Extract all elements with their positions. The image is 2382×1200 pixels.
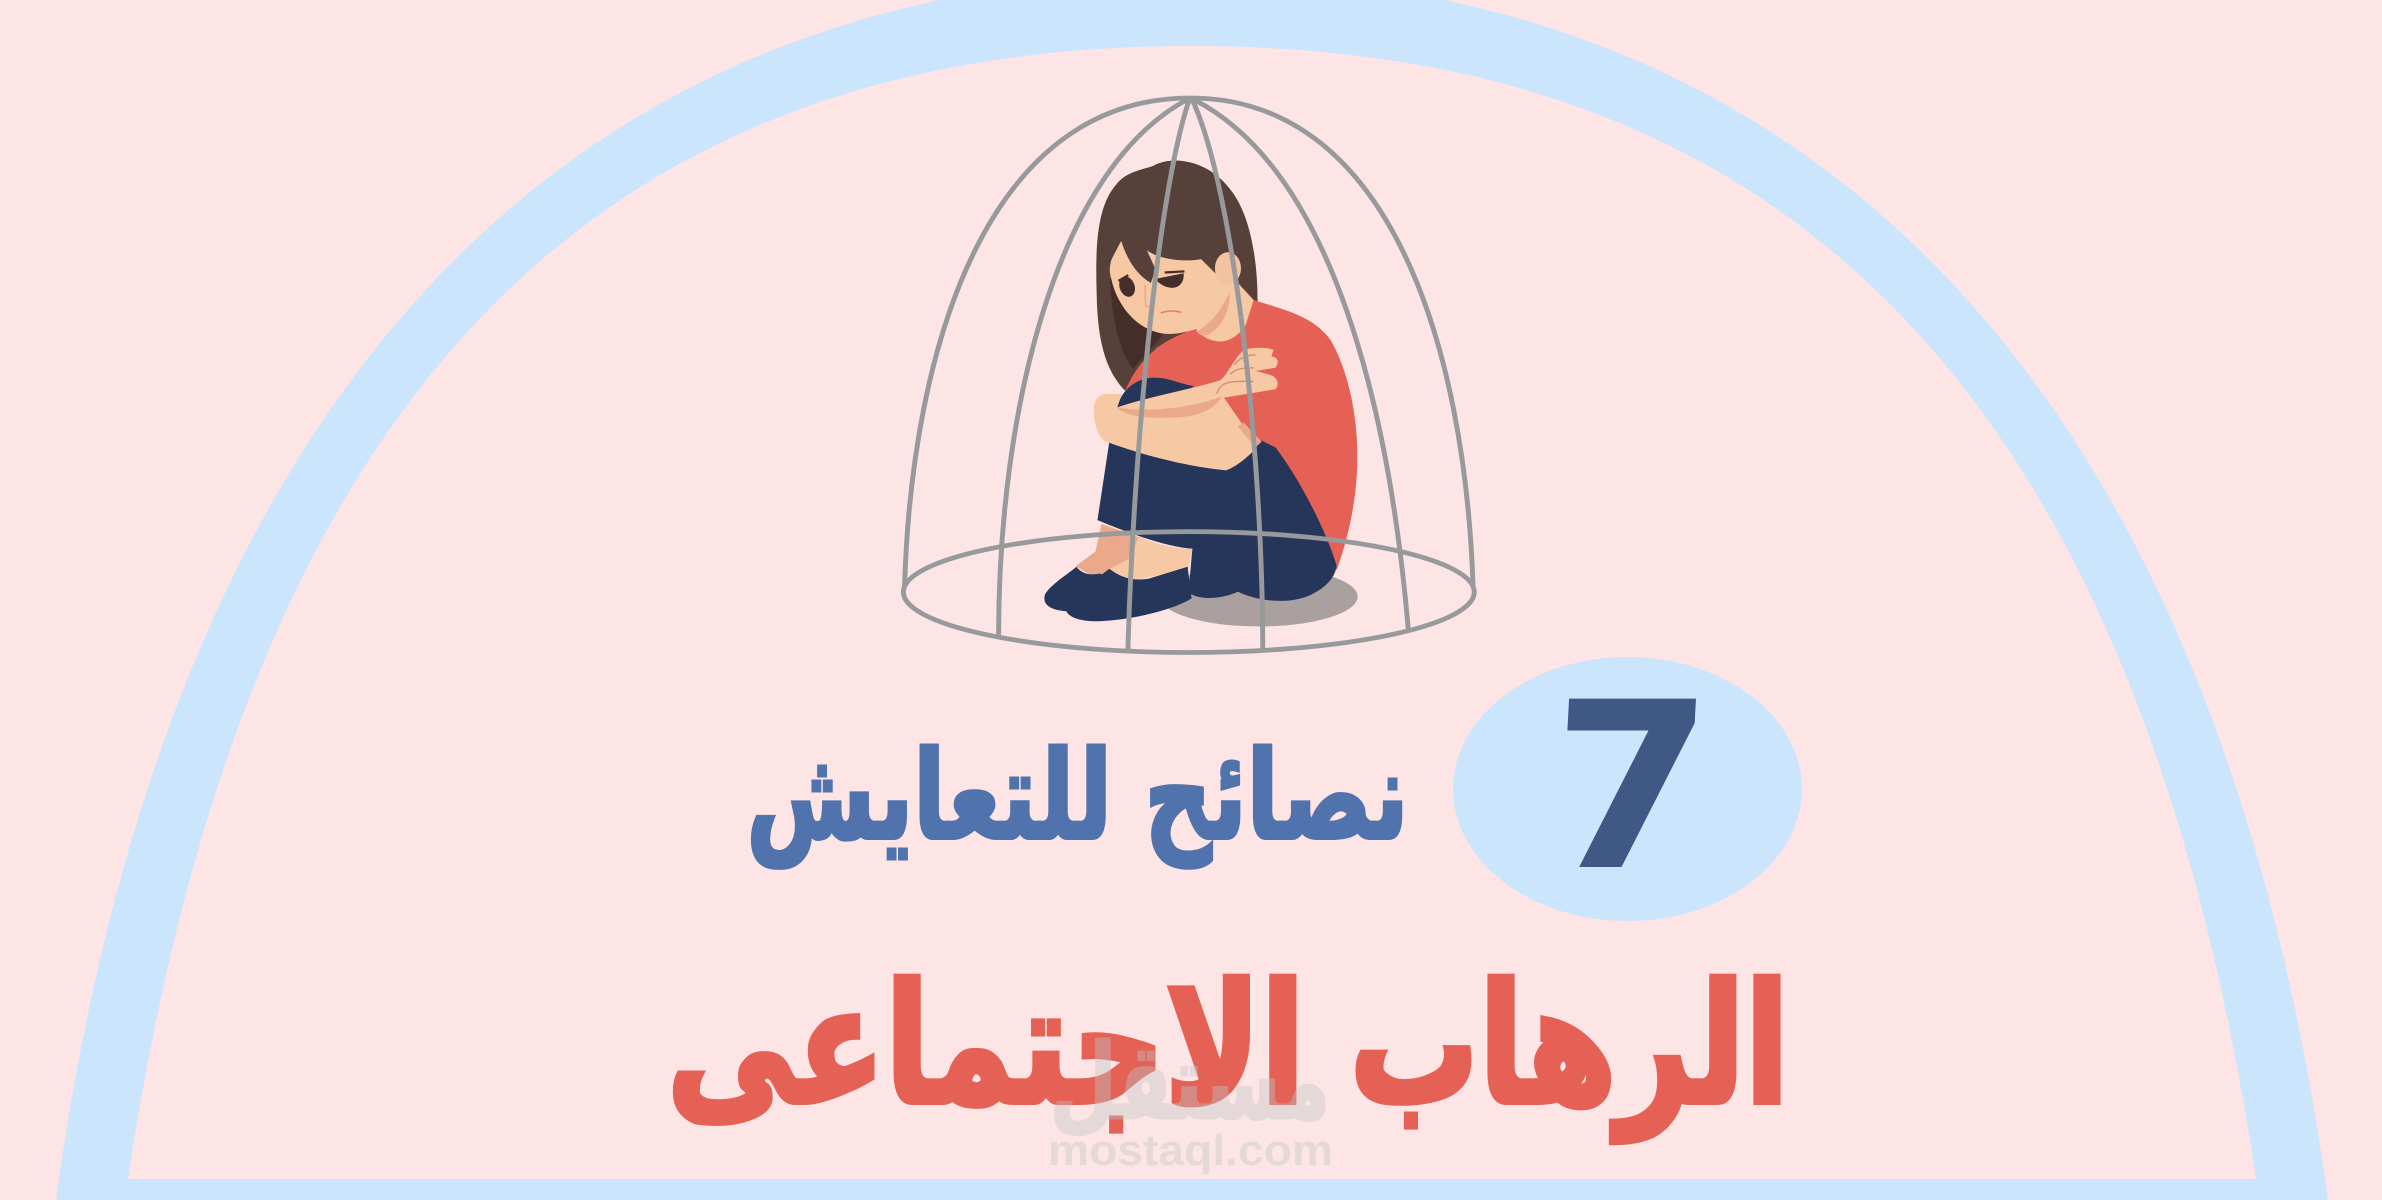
navy knee: [1117, 378, 1194, 409]
illustration: girl in a glass cage: [903, 98, 1474, 653]
main title: الرهاب الاجتماعى: [667, 949, 1789, 1142]
watermark url: mostaql.com: [1048, 1126, 1333, 1175]
mouth: [1161, 311, 1181, 313]
forearm shadow: [1117, 396, 1222, 418]
centre left rib: [1128, 100, 1189, 650]
right rib: [1194, 100, 1408, 629]
back ankle: [1076, 524, 1142, 577]
dark inner hair: [1110, 271, 1165, 369]
front shoe: [1066, 567, 1192, 621]
face: [1110, 241, 1238, 334]
left eye: [1117, 275, 1138, 299]
nose: [1145, 285, 1153, 308]
navy legs: [1097, 441, 1337, 601]
neck: [1196, 264, 1254, 342]
neck shadow: [1197, 292, 1230, 336]
number badge: [1453, 652, 1802, 922]
outer dome: [905, 98, 1473, 587]
front hair: [1111, 161, 1239, 283]
number seven: 7: [1542, 652, 1717, 922]
red shirt: [1125, 300, 1357, 570]
elbow shadow: [1238, 423, 1262, 447]
wire cage: [903, 98, 1474, 653]
front ankle: [1109, 536, 1192, 581]
left rib: [999, 100, 1186, 635]
back shoe: [1044, 567, 1117, 611]
cage base ring: [903, 532, 1474, 653]
girl hugging her knees: [1044, 161, 1358, 626]
back hair: [1096, 161, 1258, 391]
ear: [1215, 252, 1241, 284]
eyebrows: [1118, 271, 1184, 281]
arms and hand: [1094, 348, 1278, 470]
centre right rib: [1192, 100, 1263, 650]
finger lines: [1217, 355, 1256, 394]
watermark arabic logotype: مستقل: [1050, 1021, 1330, 1143]
right eye: [1155, 273, 1184, 288]
subtitle: نصائح للتعايش: [746, 725, 1408, 868]
watermark: [1048, 1021, 1333, 1175]
floor shadow: [1160, 567, 1358, 626]
